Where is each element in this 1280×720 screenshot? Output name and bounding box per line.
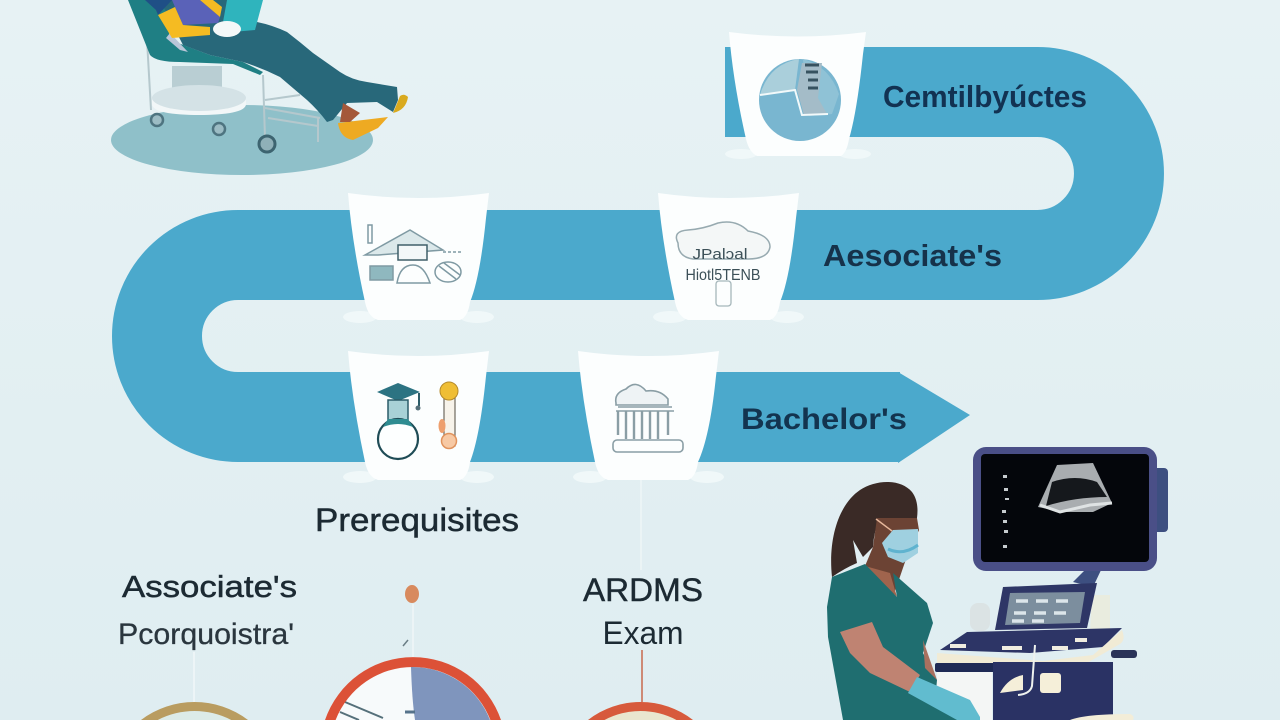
illustration: sonographer in scrubs xyxy=(827,482,980,720)
connector: bachelor's to exam xyxy=(640,480,642,570)
icon: globe document xyxy=(759,59,841,141)
heading: associate's prerequisites: Pcorquoistra' xyxy=(118,618,294,651)
circle: associate's prerequisite xyxy=(141,702,248,720)
label: bachelor's: Bachelor's xyxy=(741,403,907,436)
heading: associate's prerequisites: Associate's xyxy=(122,569,297,604)
illustration: ultrasound machine xyxy=(935,447,1168,720)
heading: prerequisites: Prerequisites xyxy=(315,502,519,538)
icon: columned building xyxy=(613,384,683,452)
ultrasound image xyxy=(1038,463,1112,512)
card: certificates xyxy=(725,32,871,159)
connector: centre pin xyxy=(403,585,419,658)
heading: ARDMS exam: Exam xyxy=(602,615,684,651)
connector: exam xyxy=(641,650,643,703)
heading: ARDMS exam: ARDMS xyxy=(583,572,703,608)
circle: ARDMS exam xyxy=(588,702,693,720)
heading: associate's prerequisites xyxy=(118,569,297,651)
icon: cloud with text: JPalɔal xyxy=(692,246,748,263)
connector: left circle xyxy=(193,652,195,703)
label: certificates: Cemtilbyúctes xyxy=(883,79,1087,114)
icon: clinical equipment xyxy=(365,225,462,283)
icon: cloud with text xyxy=(676,222,770,306)
icon: cloud with text: Hiotl5TENB xyxy=(686,267,760,284)
heading: ARDMS exam xyxy=(583,572,703,651)
card: prerequisites icons xyxy=(343,351,494,483)
card: bachelor's xyxy=(573,351,724,483)
illustration: patient reclining in chair xyxy=(111,0,408,175)
label: associate's: Aesociate's xyxy=(823,238,1002,273)
icon: graduation cap flask xyxy=(377,383,420,459)
icon: thermometer xyxy=(438,382,458,448)
serpentine pathway arrow xyxy=(157,92,1119,463)
card: associate right xyxy=(653,193,804,323)
card: associate left xyxy=(343,193,494,323)
circle: centre clinical scene xyxy=(325,657,501,720)
